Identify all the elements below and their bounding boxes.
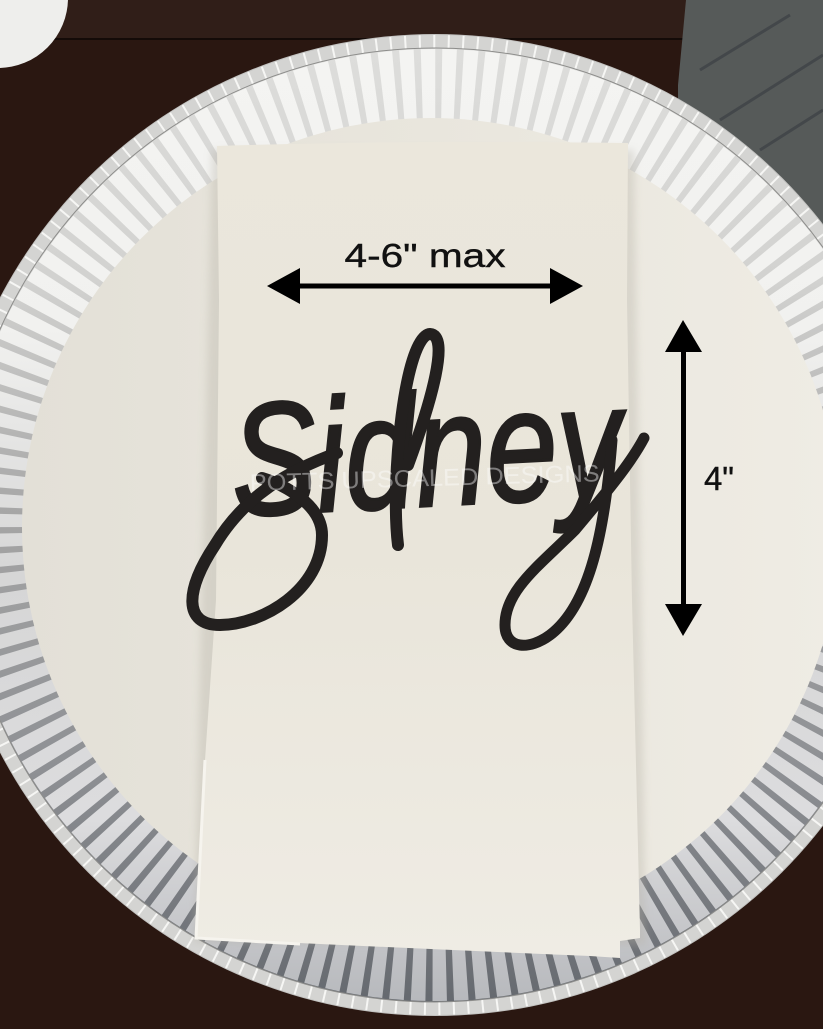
- black script name sign: [192, 334, 644, 645]
- height arrow: [665, 320, 702, 636]
- S loop flourish: [192, 453, 337, 625]
- d ascender flourish: [396, 334, 439, 545]
- cream dinner plate: [22, 118, 823, 936]
- white bowl: [0, 0, 68, 68]
- dark grey cloth: [678, 0, 823, 320]
- folded linen napkin: [196, 142, 640, 958]
- black script name sign: Sidney: [226, 350, 632, 550]
- napkin shadow: [194, 150, 646, 945]
- height label: 4": [704, 460, 734, 497]
- y tail flourish: [505, 438, 644, 645]
- width label: 4-6" max: [344, 237, 506, 274]
- width arrow: [267, 268, 583, 304]
- watermark: POTTS UPSCALED DESIGNS: [249, 460, 600, 497]
